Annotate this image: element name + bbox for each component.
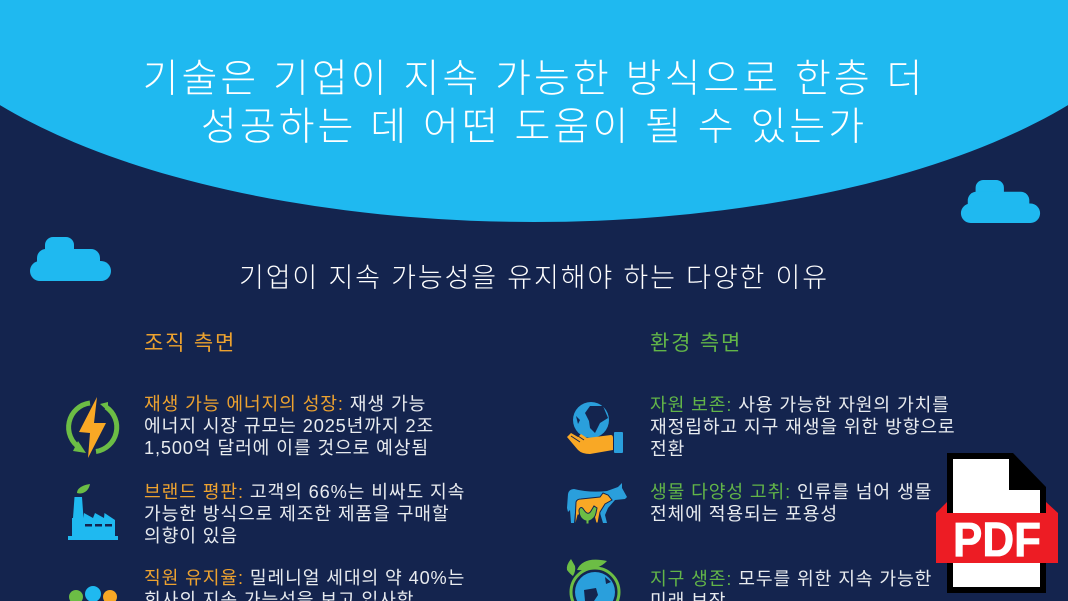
text: brand reputation: 가능한 방식으로 제조한 제품을 구매할 — [144, 504, 450, 524]
icon: globe in hand — [567, 402, 623, 454]
icon: animals — [567, 483, 627, 524]
icon: PDF badge: PDF — [953, 514, 1041, 567]
text: biodiversity — [650, 482, 932, 524]
heading: environment: 환경 측면 — [650, 332, 742, 355]
title: 기술은 기업이 지속 가능한 방식으로 한층 더 — [143, 58, 925, 101]
text: renewable energy: 에너지 시장 규모는 2025년까지 2조 — [144, 416, 434, 436]
title: 성공하는 데 어떤 도움이 될 수 있는가 — [201, 106, 867, 149]
heading: organization: 조직 측면 — [144, 332, 236, 355]
icon: earth with leaves — [566, 559, 620, 601]
text: employee retention: 직원 유지율: 밀레니얼 세대의 약 40%는 — [144, 568, 465, 588]
text: resource conservation: 재정립하고 지구 재생을 위한 방향으로 — [650, 417, 956, 437]
icon: renewable energy — [66, 397, 120, 458]
text: planet survival: 지구 생존: 모두를 위한 지속 가능한 — [650, 569, 932, 589]
text: renewable energy — [144, 394, 434, 458]
text: renewable energy: 재생 가능 에너지의 성장: 재생 가능 — [144, 394, 426, 414]
icon: people — [69, 586, 117, 601]
title — [143, 58, 925, 149]
icon: PDF badge — [936, 453, 1058, 593]
icon: cloud right — [960, 180, 1040, 223]
text: brand reputation: 브랜드 평판: 고객의 66%는 비싸도 지속 — [144, 482, 465, 502]
icon: cloud left — [30, 237, 111, 281]
text: employee retention — [144, 568, 465, 601]
text: biodiversity: 생물 다양성 고취: 인류를 넘어 생물 — [650, 482, 932, 502]
icon: factory — [68, 484, 118, 540]
text: resource conservation: 자원 보존: 사용 가능한 자원의 가치를 — [650, 395, 950, 415]
text: resource conservation — [650, 395, 956, 459]
text: brand reputation: 의향이 있음 — [144, 526, 238, 546]
text: brand reputation — [144, 482, 465, 546]
text: biodiversity: 전체에 적용되는 포용성 — [650, 504, 838, 524]
text: planet survival — [650, 569, 932, 601]
text: renewable energy: 1,500억 달러에 이를 것으로 예상됨 — [144, 438, 429, 458]
text: resource conservation: 전환 — [650, 439, 685, 459]
subtitle: 기업이 지속 가능성을 유지해야 하는 다양한 이유 — [239, 263, 829, 293]
